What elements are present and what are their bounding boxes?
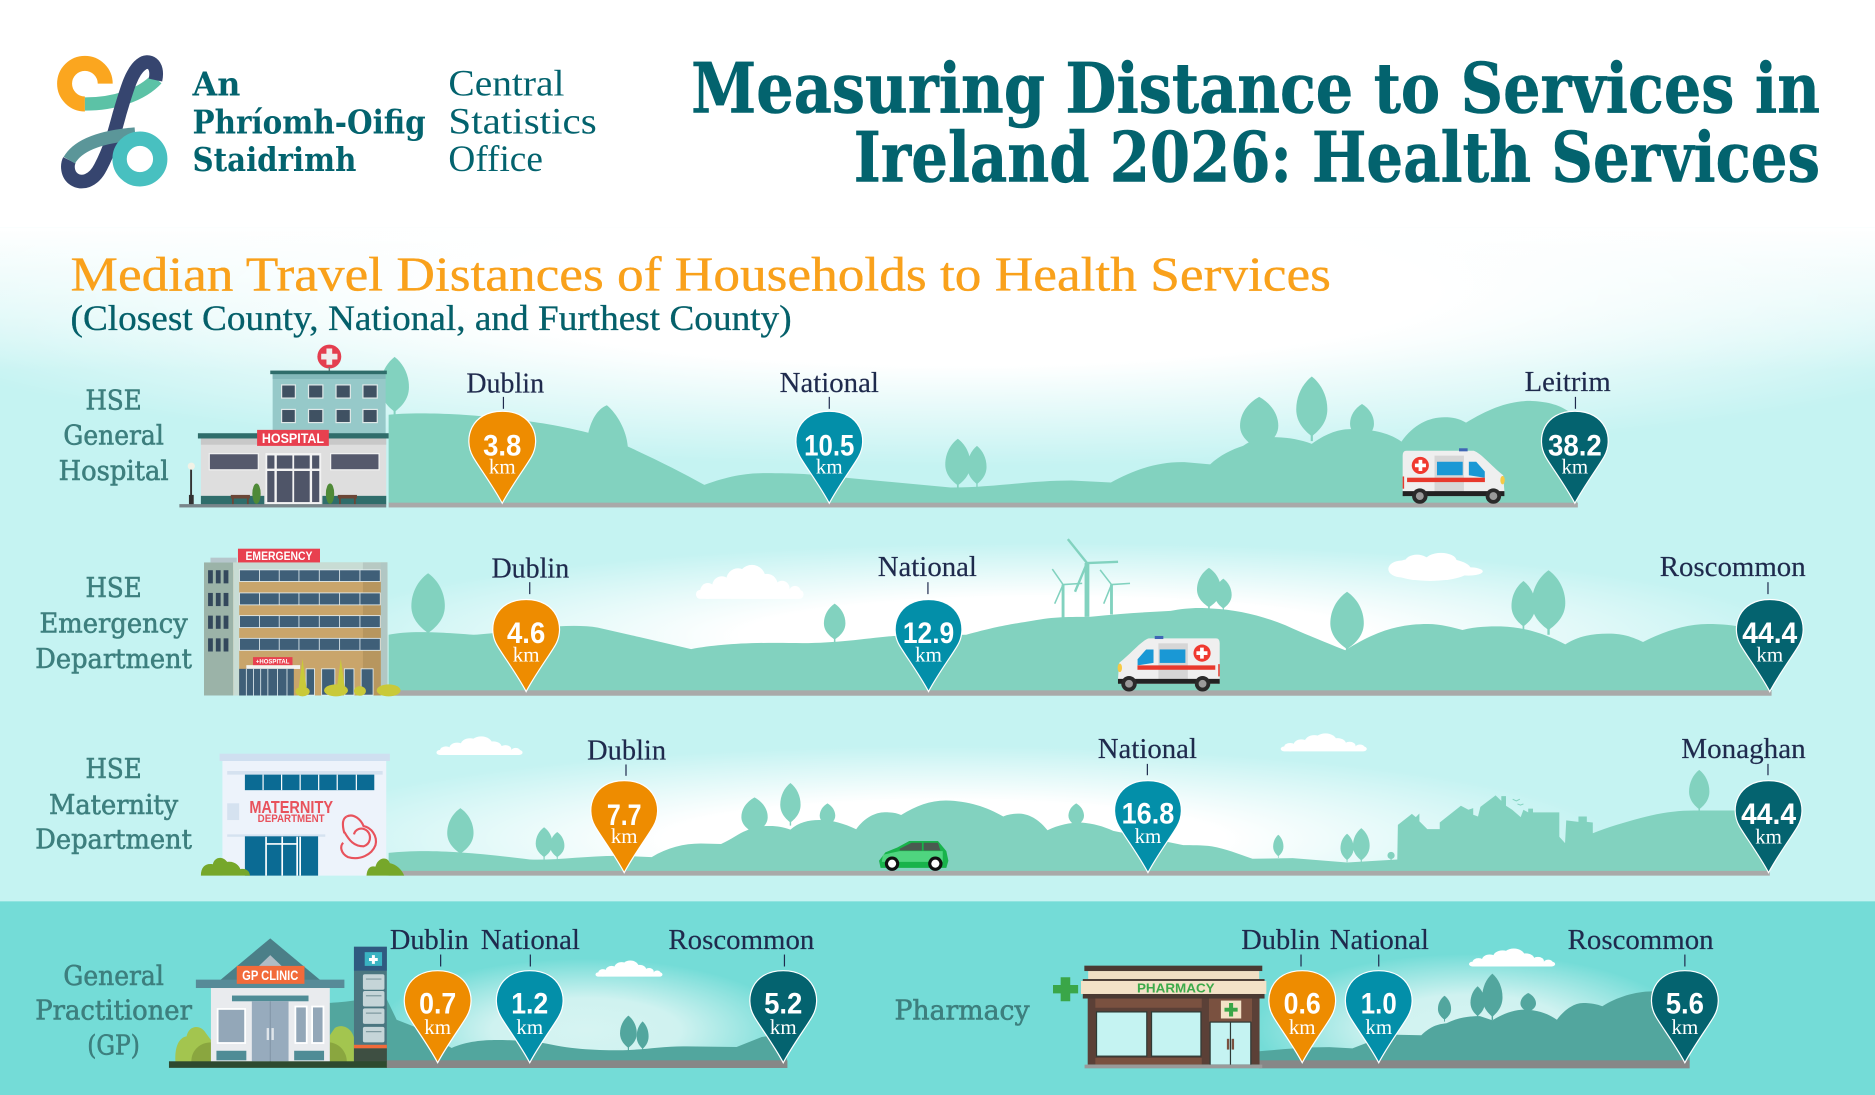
pin: GP Roscommon 5.2 km <box>668 924 817 1063</box>
pin: Emergency National 12.9 km: 12.9 <box>903 617 954 650</box>
pin: Emergency Roscommon 44.4 km: km <box>1756 643 1783 667</box>
pin: Hospital Dublin 3.8 km <box>466 368 544 503</box>
pin: Hospital Leitrim 38.2 km: km <box>1561 454 1588 478</box>
icon: emergency building <box>204 549 401 696</box>
pin: Emergency Dublin 4.6 km: km <box>513 643 540 667</box>
row 2 road <box>389 690 1772 696</box>
pin: Emergency Roscommon 44.4 km <box>1660 551 1806 692</box>
pin: Emergency Dublin 4.6 km <box>491 552 569 692</box>
pin: Pharmacy Roscommon 5.6 km: 5.6 <box>1666 988 1704 1021</box>
row label: HSE General Hospital: Hospital <box>59 455 169 487</box>
pin: Maternity Dublin 7.7 km: Dublin <box>587 735 666 767</box>
pin: Pharmacy Dublin 0.6 km: 0.6 <box>1284 988 1321 1021</box>
pin: GP National 1.2 km: National <box>481 924 580 956</box>
row label: HSE Emergency Department: Department <box>35 643 192 675</box>
pin: Pharmacy Dublin 0.6 km: km <box>1289 1015 1316 1039</box>
row label: Pharmacy: Pharmacy <box>894 995 1030 1027</box>
row 2 scenery: hills, trees, clouds, wind turbines <box>389 539 1772 691</box>
pin: Pharmacy National 1.0 km <box>1330 924 1429 1063</box>
icon: hospital building <box>179 345 389 507</box>
row 4 GP scenery <box>329 997 787 1062</box>
pin: Hospital National 10.5 km: km <box>816 454 843 478</box>
row label: HSE Maternity Department <box>35 753 192 856</box>
row label: HSE General Hospital: General <box>63 420 164 452</box>
icon: maternity building: MATERNITY <box>249 797 333 817</box>
pin: Pharmacy National 1.0 km: km <box>1365 1015 1392 1039</box>
pin: Emergency Dublin 4.6 km: Dublin <box>491 552 569 584</box>
pin: Pharmacy Dublin 0.6 km: Dublin <box>1241 924 1320 956</box>
clouds row 3 <box>436 733 1367 755</box>
row label: HSE Maternity Department: Department <box>35 824 192 856</box>
row label: HSE Emergency Department: HSE <box>85 572 142 604</box>
logo: An <box>192 66 240 104</box>
row label: HSE General Hospital: HSE <box>85 384 142 416</box>
heading: Median Travel Distances of Households to Health Services <box>71 246 1331 301</box>
pin: GP National 1.2 km: km <box>516 1015 543 1039</box>
logo: Statistics <box>448 101 597 142</box>
pin: Maternity Dublin 7.7 km: 7.7 <box>607 799 642 832</box>
logo: Central <box>448 64 564 105</box>
logo <box>65 62 597 182</box>
pin: GP Dublin 0.7 km: km <box>424 1015 451 1039</box>
pin: Pharmacy National 1.0 km: 1.0 <box>1361 988 1397 1021</box>
GP road <box>386 1060 787 1068</box>
icon: pharmacy building: PHARMACY <box>1137 981 1215 996</box>
cloud row 4 pharmacy <box>1469 949 1555 966</box>
pin: Pharmacy Roscommon 5.6 km: km <box>1672 1015 1698 1039</box>
icon: maternity building <box>201 754 404 876</box>
icon: maternity building: DEPARTMENT <box>258 813 325 825</box>
pin: Hospital Leitrim 38.2 km: Leitrim <box>1525 366 1611 398</box>
pin: GP Roscommon 5.2 km: km <box>770 1015 797 1039</box>
icon: pharmacy building <box>1053 966 1266 1068</box>
logo: Staidrimh <box>193 141 356 179</box>
icon: GP clinic building: GP CLINIC <box>242 968 298 983</box>
pin: Pharmacy Dublin 0.6 km <box>1241 924 1336 1063</box>
pin: Emergency National 12.9 km <box>878 551 977 692</box>
pin: GP Dublin 0.7 km <box>390 924 471 1063</box>
pin: Maternity National 16.8 km: National <box>1098 733 1197 765</box>
pharmacy road <box>1259 1060 1690 1068</box>
pin: Maternity National 16.8 km: 16.8 <box>1122 798 1174 831</box>
pin: Emergency Roscommon 44.4 km: 44.4 <box>1742 617 1798 650</box>
title <box>691 48 1820 199</box>
pin: Maternity Monaghan 44.4 km <box>1681 733 1806 873</box>
pin: GP Dublin 0.7 km: Dublin <box>390 924 469 956</box>
row 2 ambulance <box>1118 636 1220 691</box>
icon: GP clinic building <box>169 938 387 1068</box>
row 4 pharmacy scenery <box>1259 974 1690 1062</box>
row 1 scenery: hills and trees <box>380 357 1577 503</box>
pin: Maternity Monaghan 44.4 km: km <box>1755 824 1782 848</box>
pin: Maternity National 16.8 km: km <box>1135 824 1161 848</box>
pin: Emergency National 12.9 km: National <box>878 551 977 583</box>
pin: Emergency Roscommon 44.4 km: Roscommon <box>1660 551 1806 583</box>
pin: Hospital Dublin 3.8 km: 3.8 <box>483 429 521 462</box>
row label: General Practitioner (GP): (GP) <box>87 1029 140 1061</box>
pin: Maternity Dublin 7.7 km <box>587 735 666 873</box>
pin: Pharmacy National 1.0 km: National <box>1330 924 1429 956</box>
pin: Maternity Monaghan 44.4 km: Monaghan <box>1681 733 1806 765</box>
pin: Hospital National 10.5 km: National <box>780 367 879 399</box>
pin: GP Dublin 0.7 km: 0.7 <box>419 988 456 1021</box>
pin: Maternity Monaghan 44.4 km: 44.4 <box>1741 798 1796 831</box>
pin: Emergency National 12.9 km: km <box>915 643 942 667</box>
pin: Hospital National 10.5 km: 10.5 <box>804 429 854 462</box>
row label: HSE Emergency Department <box>35 572 192 675</box>
icon: hospital building: HOSPITAL <box>262 431 324 446</box>
clouds row 2 <box>696 553 1483 599</box>
pin: Hospital National 10.5 km <box>780 367 879 503</box>
pin: GP Roscommon 5.2 km: 5.2 <box>764 988 802 1021</box>
icon: emergency building: EMERGENCY <box>245 549 312 563</box>
pin: Maternity National 16.8 km <box>1098 733 1197 873</box>
row label: General Practitioner (GP): Practitioner <box>35 995 193 1027</box>
row 3 scenery: hills, trees, town <box>389 770 1770 873</box>
logo: Phríomh-Oifig <box>193 103 426 141</box>
row label: HSE Maternity Department: Maternity <box>49 789 179 821</box>
background <box>0 227 1875 1095</box>
pin: Emergency Dublin 4.6 km: 4.6 <box>507 617 545 650</box>
pin: Hospital Leitrim 38.2 km: 38.2 <box>1548 429 1602 462</box>
pin: GP National 1.2 km <box>481 924 580 1063</box>
icon: emergency building: +HOSPITAL <box>256 659 290 665</box>
row label: HSE Emergency Department: Emergency <box>39 607 188 639</box>
pin: Hospital Dublin 3.8 km: Dublin <box>466 368 544 400</box>
subheading: (Closest County, National, and Furthest County) <box>71 298 792 338</box>
row label: HSE Maternity Department: HSE <box>85 753 142 785</box>
row 3 car <box>879 841 948 871</box>
pin: Hospital Leitrim 38.2 km <box>1525 366 1611 503</box>
pin: Hospital Dublin 3.8 km: km <box>489 454 516 478</box>
row 1 ambulance <box>1403 448 1505 504</box>
row label: General Practitioner (GP): General <box>63 960 164 992</box>
row 1 road <box>389 503 1578 507</box>
row label: HSE General Hospital <box>59 384 169 487</box>
pin: GP National 1.2 km: 1.2 <box>511 988 548 1021</box>
pin: Maternity Dublin 7.7 km: km <box>611 824 638 848</box>
pin: Pharmacy Roscommon 5.6 km <box>1568 924 1718 1063</box>
row 3 road <box>389 871 1770 876</box>
cloud row 4 GP <box>596 961 662 977</box>
logo: Office <box>448 139 543 180</box>
pin: GP Roscommon 5.2 km: Roscommon <box>668 924 814 956</box>
row label: General Practitioner (GP) <box>35 960 193 1061</box>
pin: Pharmacy Roscommon 5.6 km: Roscommon <box>1568 924 1714 956</box>
